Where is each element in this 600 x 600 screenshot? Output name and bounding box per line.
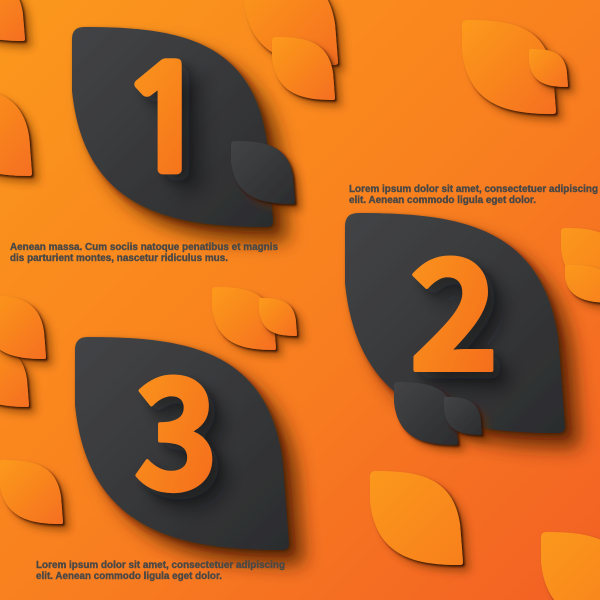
- leaf: left upper: [0, 87, 32, 176]
- text block: step 3: Lorem ipsum dolor sit amet, consectetuer adipiscing: [36, 560, 285, 571]
- leaf: left lower back: [0, 343, 29, 407]
- number 3: 3: [134, 312, 218, 533]
- text block: step 3: elit. Aenean commodo ligula eget dolor.: [36, 571, 222, 582]
- leaf: right edge lower: [565, 265, 600, 303]
- leaf: lower left: [0, 460, 63, 524]
- leaf: centre large: [212, 287, 276, 350]
- leaf: top centre large: [244, 0, 338, 65]
- number 1: 1: [117, 49, 215, 193]
- leaf: bottom right: [541, 532, 600, 600]
- leaf: bottom centre: [370, 471, 463, 565]
- text block: step 1: Aenean massa. Cum sociis natoque penatibus et magnis: [10, 242, 278, 253]
- text block: step 1: dis parturient montes, nascetur ridiculus mus.: [10, 253, 228, 264]
- leaf: left lower front: [0, 295, 46, 359]
- leaf: centre small: [259, 298, 297, 336]
- leaf: top centre small: [272, 37, 335, 100]
- smaller dark leaf: [444, 397, 482, 435]
- leaf: top right small: [529, 49, 568, 87]
- dark leaf 3: [75, 337, 289, 550]
- dark leaf 1: [72, 27, 273, 227]
- small dark leaf: [231, 141, 295, 204]
- panel: step 3: [75, 312, 289, 550]
- panel: step 1: [72, 27, 295, 227]
- text block: step 2: Lorem ipsum dolor sit amet, consectetuer adipiscing: [349, 184, 598, 195]
- number 2: 2: [409, 194, 499, 415]
- text block: step 2: elit. Aenean commodo ligula eget dolor.: [349, 195, 536, 206]
- dark leaf 2: [345, 213, 565, 433]
- leaf: top right large: [462, 20, 556, 114]
- leaf: right edge upper: [561, 228, 600, 292]
- panel: step 2: [345, 194, 565, 445]
- leaf: top left corner: [0, 0, 25, 41]
- small dark leaf: [394, 382, 458, 445]
